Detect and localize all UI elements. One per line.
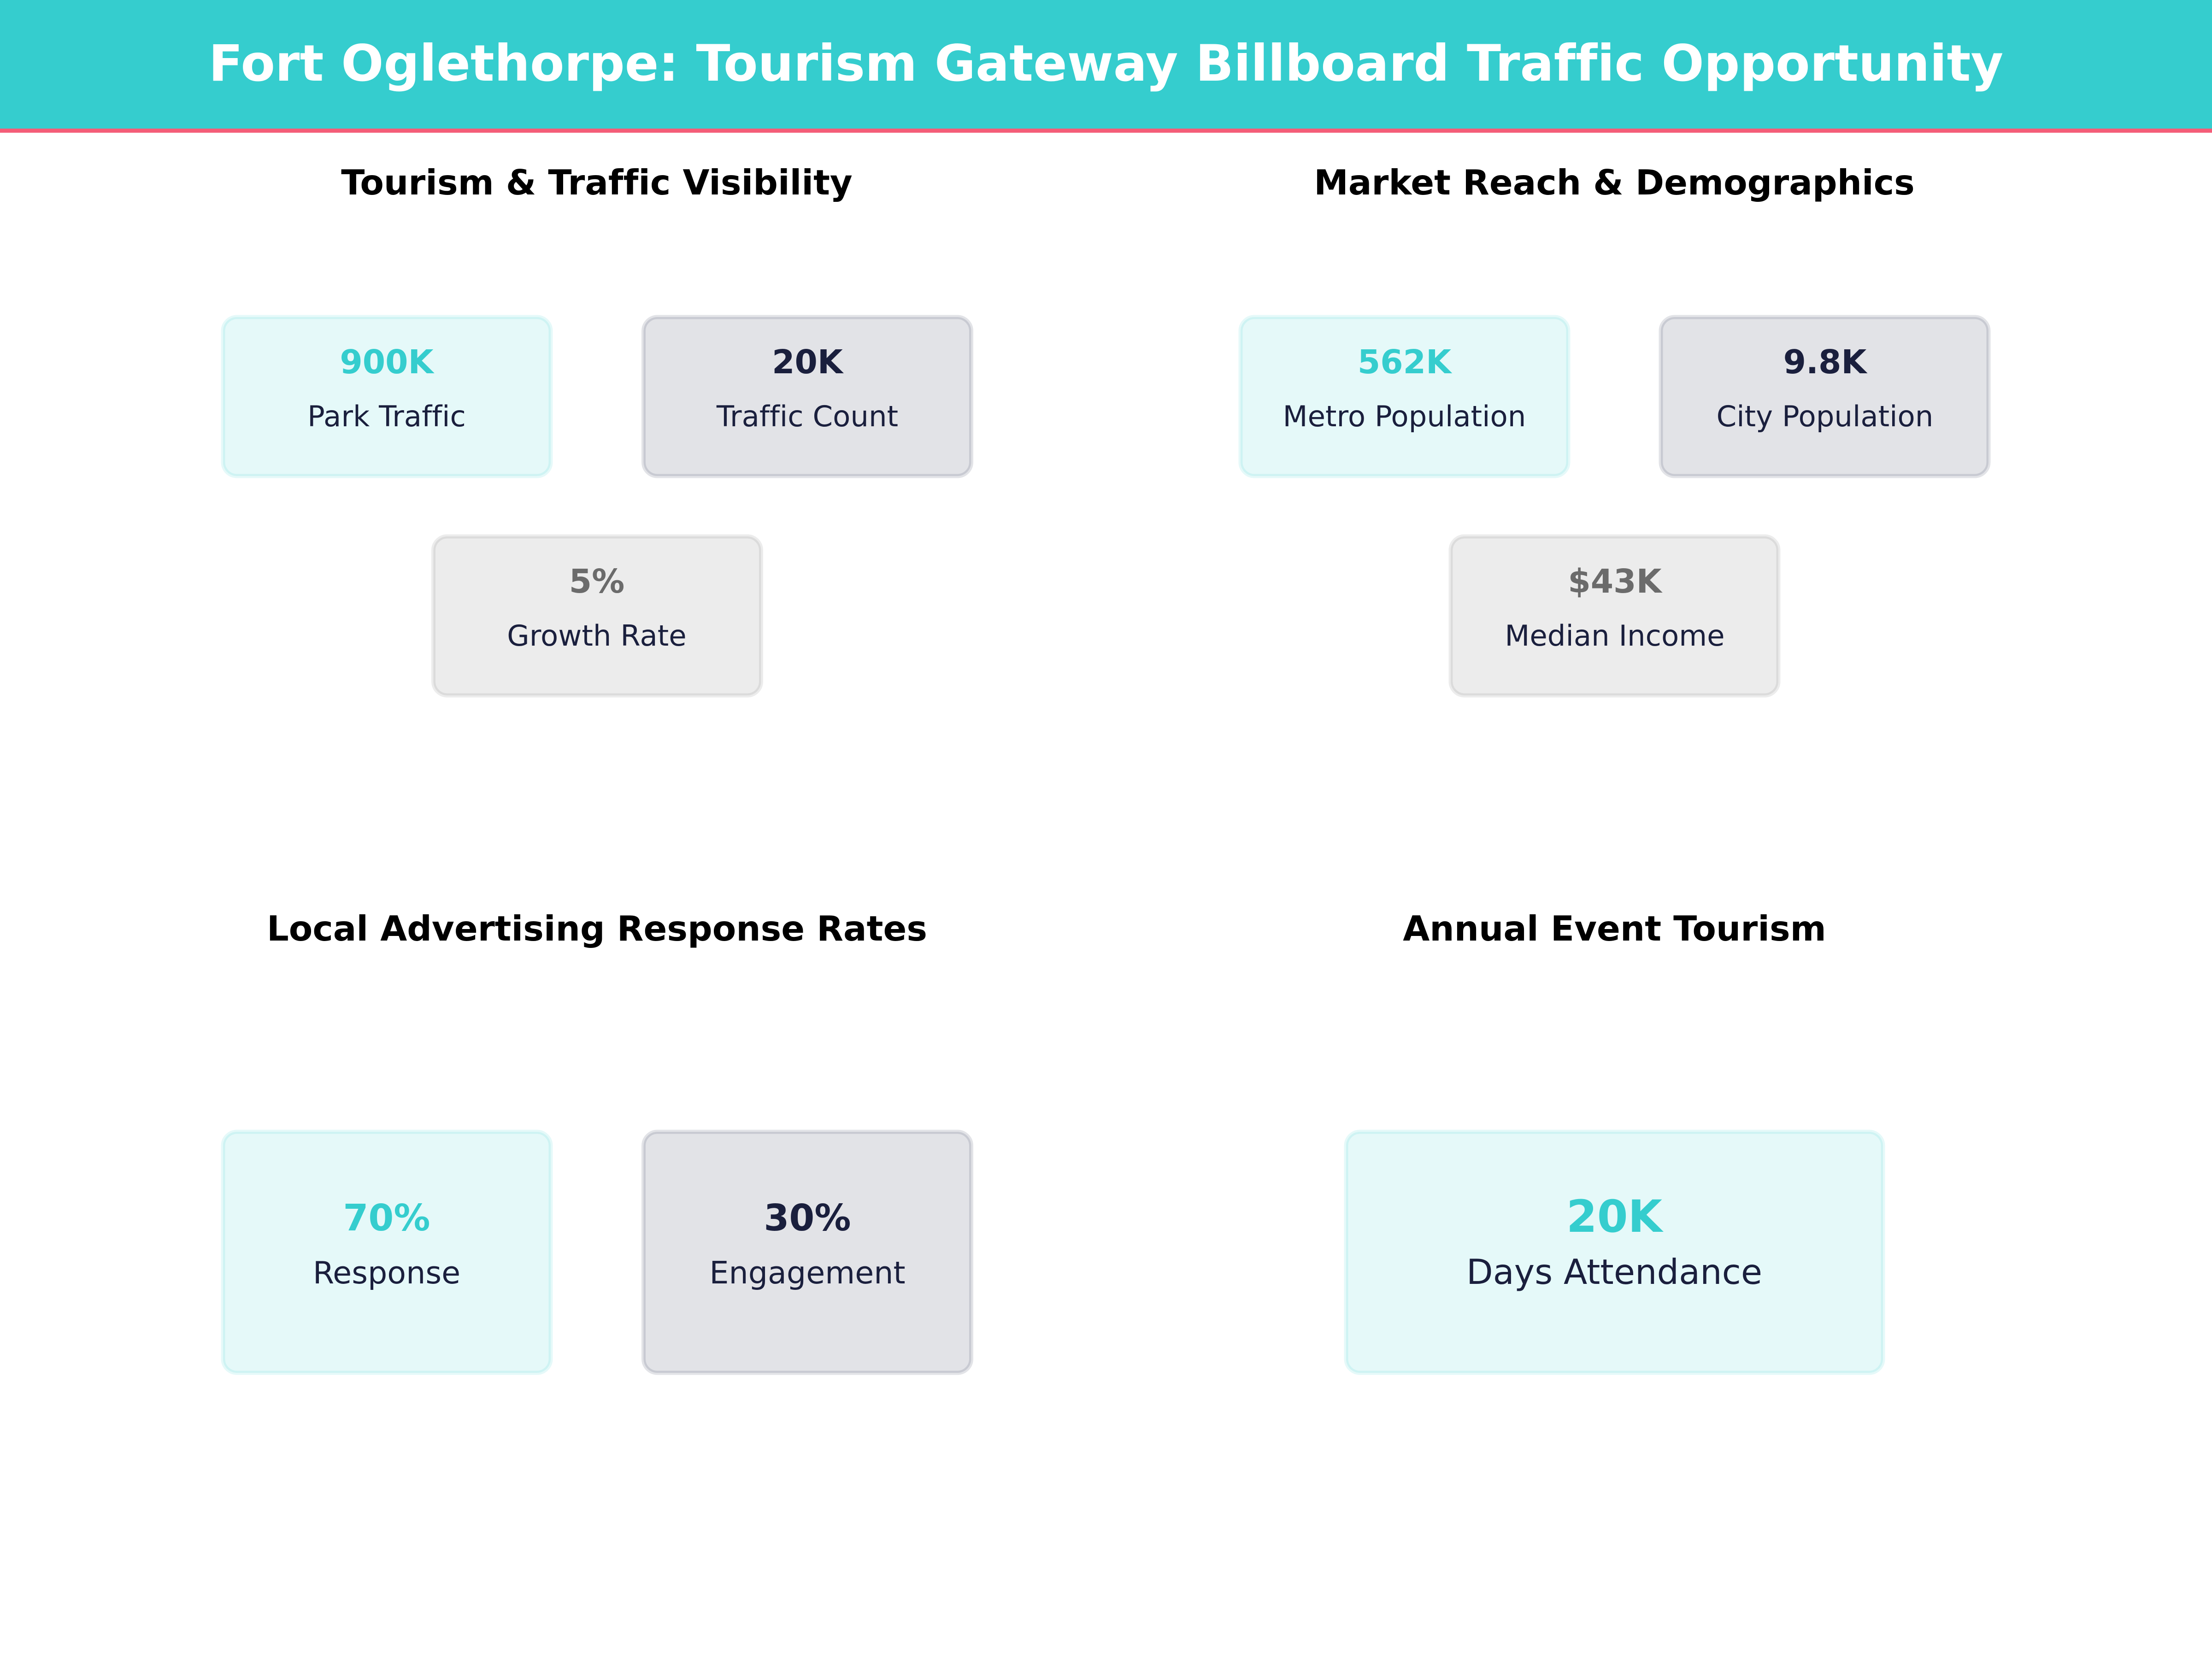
panel: local advertising response rates — [223, 908, 971, 1373]
stat card: metro population — [1241, 317, 1568, 476]
stat card: park traffic — [223, 317, 551, 476]
stat card: response — [223, 1132, 551, 1373]
stat card: median income: $43K — [1568, 562, 1663, 600]
stat card: days attendance — [1346, 1132, 1883, 1373]
stat card: days attendance: 20K — [1566, 1191, 1664, 1242]
stat card: response: Response — [313, 1255, 460, 1291]
panel: annual event tourism — [1346, 908, 1883, 1373]
header banner — [0, 0, 2212, 133]
stat card: city population — [1661, 317, 1988, 476]
heading: tourism and traffic visibility: Tourism & Traffic Visibility — [341, 162, 853, 203]
stat card: metro population: 562K — [1358, 343, 1453, 381]
stat card: engagement — [643, 1132, 971, 1373]
stat card: traffic count: Traffic Count — [716, 400, 898, 433]
stat card: growth rate — [433, 536, 761, 695]
stat card: days attendance: Days Attendance — [1466, 1252, 1762, 1292]
stat card: traffic count — [643, 317, 971, 476]
stat card: growth rate: 5% — [569, 562, 624, 600]
stat card: response: 70% — [343, 1197, 430, 1239]
stat card: metro population: Metro Population — [1283, 400, 1526, 433]
stat card: city population: City Population — [1717, 400, 1933, 433]
stat card: engagement: Engagement — [709, 1255, 906, 1291]
panel: tourism and traffic visibility — [223, 162, 971, 695]
stat card: traffic count: 20K — [772, 343, 844, 381]
stat card: growth rate: Growth Rate — [507, 619, 687, 653]
heading: market reach and demographics: Market Reach & Demographics — [1314, 162, 1915, 203]
title: Fort Oglethorpe: Tourism Gateway Billboard Traffic Opportunity — [209, 34, 2003, 93]
heading: annual event tourism: Annual Event Tourism — [1403, 908, 1826, 949]
stat card: park traffic: Park Traffic — [307, 400, 466, 433]
stat card: engagement: 30% — [764, 1197, 851, 1239]
stat card: park traffic: 900K — [340, 343, 435, 381]
stat card: city population: 9.8K — [1783, 343, 1868, 381]
heading: local advertising response rates: Local Advertising Response Rates — [267, 908, 927, 949]
stat card: median income: Median Income — [1505, 619, 1725, 653]
panel: market reach and demographics — [1241, 162, 1988, 695]
stat card: median income — [1451, 536, 1778, 695]
